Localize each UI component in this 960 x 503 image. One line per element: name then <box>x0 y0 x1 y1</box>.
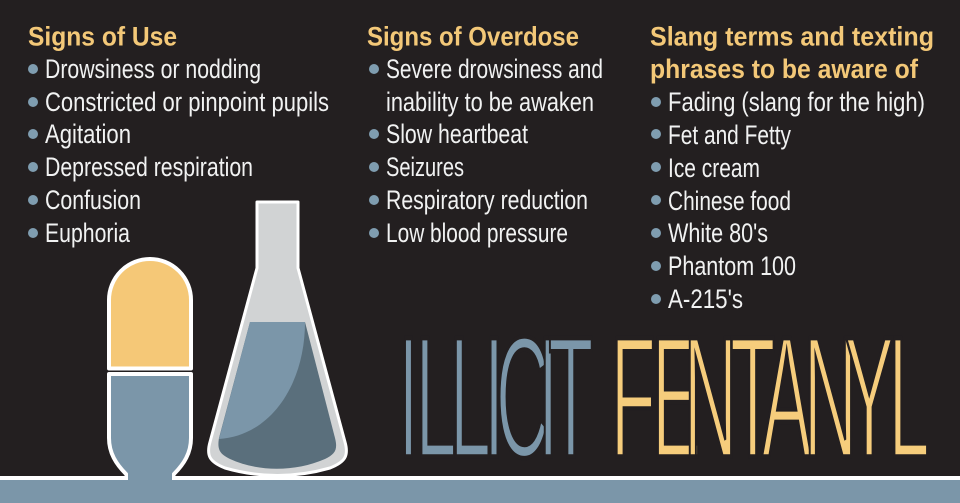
list: signs of use: Euphoria <box>45 218 131 248</box>
list: signs of overdose: Respiratory reduction <box>386 185 588 215</box>
list: signs of use <box>28 54 329 248</box>
ground bar <box>0 476 960 503</box>
heading: signs of use: Signs of Use <box>28 22 177 52</box>
list: signs of use: Confusion <box>45 185 141 215</box>
flask liquid light <box>219 322 305 439</box>
title: illicit fentanyl: FENTANYL <box>611 302 930 494</box>
capsule stem joining ground bar <box>128 470 172 503</box>
title: illicit fentanyl <box>398 302 930 494</box>
list: signs of use: Depressed respiration <box>45 152 253 182</box>
panel: signs of overdose <box>367 22 603 248</box>
list: signs of overdose: Low blood pressure <box>386 218 568 248</box>
list: slang terms: A-215's <box>668 284 743 314</box>
list: signs of use: Constricted or pinpoint pupils <box>45 87 329 117</box>
panel: slang terms <box>650 22 934 314</box>
list: signs of overdose: Seizures <box>386 152 464 182</box>
list: slang terms: Phantom 100 <box>668 251 796 281</box>
list: slang terms: Fet and Fetty <box>668 120 791 150</box>
list: signs of overdose: Slow heartbeat <box>386 119 528 149</box>
panel: signs of use <box>28 22 329 248</box>
heading: slang terms: Slang terms and texting <box>650 22 934 52</box>
heading: slang terms <box>650 22 934 84</box>
list: signs of overdose <box>369 54 603 248</box>
list: slang terms <box>651 87 925 314</box>
capsule top half <box>109 259 191 368</box>
heading: signs of overdose: Signs of Overdose <box>367 22 579 52</box>
list: slang terms: White 80's <box>668 218 768 248</box>
heading: slang terms: phrases to be aware of <box>650 54 919 84</box>
list: signs of overdose: Severe drowsiness and <box>386 54 603 84</box>
icon: capsule <box>109 259 191 503</box>
list: signs of use: Drowsiness or nodding <box>45 54 261 84</box>
title: illicit fentanyl: ILLICIT <box>398 302 593 494</box>
icon: flask <box>209 202 346 476</box>
list: slang terms: Chinese food <box>668 186 791 216</box>
list: slang terms: Ice cream <box>668 153 760 183</box>
flask liquid dark <box>218 322 336 469</box>
list: signs of overdose: inability to be awaken <box>386 87 594 117</box>
list: signs of use: Agitation <box>45 119 131 149</box>
capsule bottom half <box>109 374 191 478</box>
flask body <box>209 202 346 476</box>
